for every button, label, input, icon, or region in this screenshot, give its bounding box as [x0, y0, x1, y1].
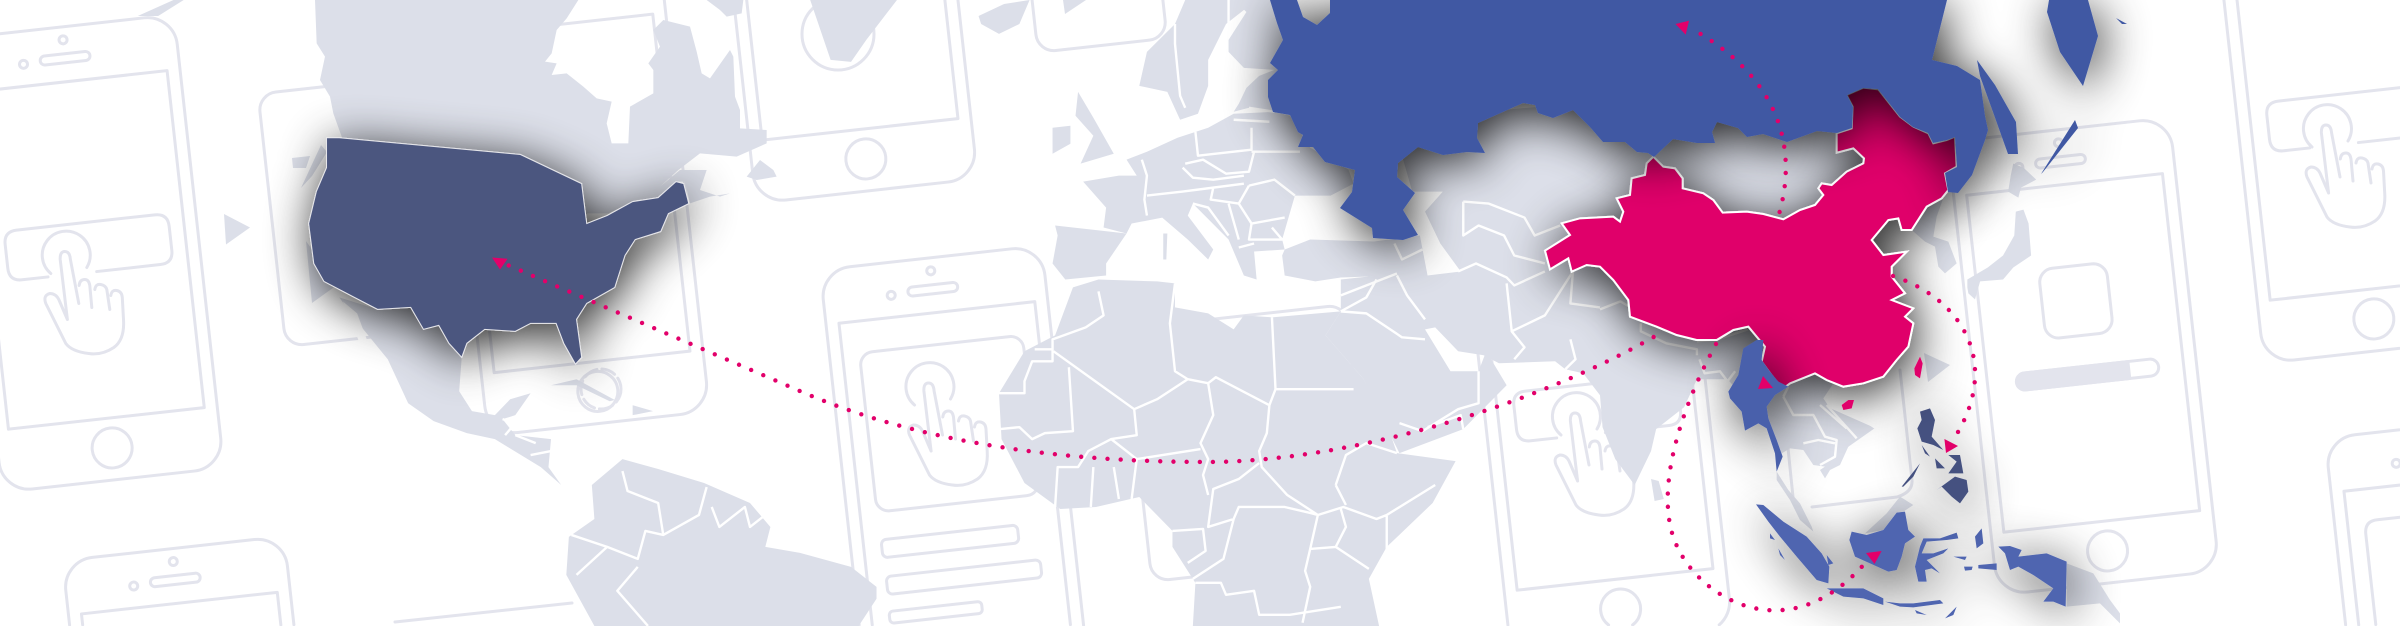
country: Philippines	[1902, 408, 1968, 503]
Java	[1827, 588, 1883, 605]
phone: behind Africa	[1124, 305, 1374, 581]
country: USA	[309, 138, 689, 364]
dotted route: China to Russia	[1676, 21, 1786, 212]
Sulawesi	[1915, 533, 1958, 582]
icon: play arrow near Taiwan	[1924, 353, 1950, 382]
arrowhead: Myanmar	[1758, 376, 1773, 389]
country: China	[1545, 88, 1957, 410]
Africa	[999, 279, 1456, 626]
Sumatra	[1756, 504, 1829, 583]
Sri Lanka	[1651, 479, 1664, 501]
Asia	[1326, 80, 1871, 485]
South America	[566, 459, 877, 626]
icon: play arrow top	[1063, 0, 1086, 14]
phone: top centre	[706, 0, 978, 203]
Mexico and Central America	[339, 297, 561, 485]
phone: bottom centre-left	[395, 603, 572, 622]
arrowhead: Indonesia	[1866, 551, 1882, 564]
phone: top right with tap button	[2214, 0, 2400, 363]
Spain	[1053, 226, 1127, 279]
Lesser Sunda	[1885, 600, 1943, 607]
icon: play arrow near Vietnam	[1823, 405, 1875, 447]
phone: right with loading bar	[1948, 118, 2219, 595]
country: Russia	[1268, 0, 2127, 240]
Kamchatka	[2047, 0, 2098, 86]
arrowhead: Philippines	[1944, 439, 1958, 453]
map country borders	[503, 0, 1875, 626]
Hainan and Taiwan	[1842, 357, 1923, 410]
play arrows and icons	[224, 0, 1950, 447]
dotted route: China to USA	[492, 258, 1664, 462]
phone: centre with form	[820, 246, 1084, 626]
arrowhead: Russia	[1676, 21, 1689, 35]
land: Canada detail	[315, 0, 777, 233]
phone: left with tap button	[0, 15, 224, 492]
phone: bottom left	[62, 536, 294, 626]
Sakhalin	[1977, 60, 2018, 154]
Luzon	[1917, 408, 1943, 450]
Iceland	[979, 0, 1030, 34]
phone: behind USA	[258, 70, 508, 346]
China mainland	[1545, 88, 1957, 388]
dotted route: China to Indonesia	[1668, 344, 1882, 610]
land: Americas	[138, 0, 877, 626]
Finland and Baltics	[1229, 0, 1290, 112]
Turkey and Caucasus	[1282, 236, 1428, 281]
Britain	[1076, 92, 1114, 164]
Maluku	[1953, 528, 1997, 571]
Papua	[1998, 546, 2067, 607]
land: Korea	[1912, 193, 1957, 273]
Kuril islands	[2041, 120, 2078, 174]
phone: bottom right with form	[2325, 414, 2400, 626]
dotted route: China to Philippines	[1893, 276, 1975, 453]
Japan	[1967, 210, 2031, 299]
phone: behind India	[1461, 176, 1732, 626]
Borneo	[1849, 512, 1915, 572]
phone: behind Gulf of Mexico	[438, 0, 710, 436]
Greenland tip	[810, 0, 897, 62]
arrowhead: USA	[492, 258, 508, 270]
phone: top, behind Scandinavia	[1010, 0, 1167, 52]
country: Myanmar	[1728, 340, 1788, 472]
Visayas	[1922, 445, 1963, 473]
Palawan	[1902, 463, 1920, 487]
icon: play arrow left	[224, 214, 250, 244]
Mainland Europe	[1083, 112, 1354, 279]
icon: shard	[306, 241, 337, 303]
phone: behind Indochina	[1788, 370, 1912, 507]
land: Europe, Africa, Asia	[810, 0, 2036, 626]
country: Indonesia	[1756, 504, 2067, 618]
icon: pencil shard	[292, 145, 327, 188]
Ireland	[1053, 126, 1070, 154]
land: Indochina, Malaya, Borneo north, PNG	[1767, 373, 2120, 623]
Mindanao	[1937, 477, 1968, 503]
Scandinavia	[1139, 0, 1246, 120]
